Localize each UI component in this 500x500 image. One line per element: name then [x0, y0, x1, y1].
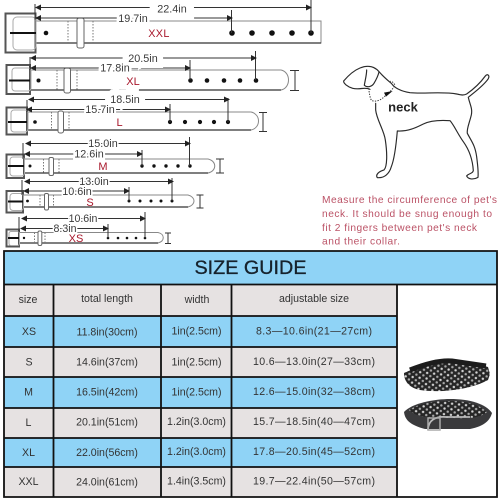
- collar diagram: XS: 8.3in: [54, 223, 77, 235]
- collar diagram: M: [6, 137, 224, 178]
- collar diagram: L: 15.7in: [85, 104, 115, 116]
- row XXL: [18, 476, 375, 488]
- studded collar: bottom: [404, 399, 492, 430]
- collar diagram: S: [6, 176, 204, 212]
- row XL: 22.0in(56cm): [76, 447, 138, 459]
- row L: 20.1in(51cm): [76, 416, 138, 428]
- row XS: 11.8in(30cm): [76, 326, 138, 338]
- collar diagram: XXL: 19.7in: [118, 13, 148, 25]
- row L: [26, 416, 375, 429]
- measuring instructions: [322, 195, 497, 248]
- measuring instructions: Measure the circumference of pet's: [322, 195, 497, 206]
- measuring instructions: and their collar.: [322, 236, 400, 248]
- row M: M: [24, 386, 33, 398]
- row XS: [22, 326, 372, 338]
- row S: [25, 356, 375, 368]
- collar diagram: L: L: [116, 117, 123, 129]
- row M: 16.5in(42cm): [76, 386, 138, 398]
- column headers: [19, 293, 349, 306]
- table row backgrounds: [4, 251, 497, 497]
- collar diagram: M: 12.6in: [74, 148, 104, 160]
- collar diagram: M: 15.0in: [88, 138, 118, 150]
- collar diagram: XS: [6, 212, 171, 246]
- studded collar: top: [404, 360, 490, 391]
- icon: dotted collar line and pointer: [369, 81, 395, 101]
- row L: 1.2in(3.0cm): [167, 416, 226, 428]
- row XS: 8.3—10.6in(21—27cm): [256, 326, 372, 338]
- row XXL: 24.0in(61cm): [76, 476, 138, 488]
- table title: SIZE GUIDE: [194, 258, 306, 279]
- row L: L: [26, 417, 32, 429]
- collar diagram: S: S: [86, 197, 94, 209]
- row M: [24, 386, 375, 398]
- collar diagram: XS: XS: [69, 233, 83, 245]
- collar diagram: M: M: [98, 161, 108, 173]
- collar diagram: XL: [6, 51, 299, 94]
- column headers: size: [19, 294, 38, 306]
- row S: 1in(2.5cm): [171, 356, 222, 368]
- row XS: 1in(2.5cm): [171, 326, 222, 338]
- dog illustration with neck label: [344, 66, 489, 179]
- measuring instructions: fit 2 fingers between pet's neck: [322, 223, 478, 234]
- collar diagram: XL: XL: [126, 76, 140, 88]
- collar diagram: L: [6, 94, 267, 134]
- measuring instructions: neck. It should be snug enough to: [322, 209, 492, 220]
- row S: 10.6—13.0in(27—33cm): [253, 356, 375, 368]
- row XL: 1.2in(3.0cm): [167, 446, 226, 458]
- row S: S: [25, 356, 33, 368]
- neck label: neck: [388, 100, 419, 114]
- row L: 15.7—18.5in(40—47cm): [253, 416, 375, 428]
- row XXL: 19.7—22.4in(50—57cm): [253, 476, 375, 488]
- collar diagram: XL: 17.8in: [100, 62, 130, 74]
- row XXL: XXL: [18, 476, 39, 488]
- collar diagram: XS: 10.6in: [69, 213, 98, 225]
- icon: dog outline: [344, 66, 489, 179]
- row M: 12.6—15.0in(32—38cm): [253, 386, 375, 398]
- collar diagram: XXL: 22.4in: [157, 4, 187, 16]
- column headers: adjustable size: [279, 293, 349, 305]
- collar diagram: S: 10.6in: [62, 186, 92, 198]
- collar diagram: S: 13.0in: [79, 176, 109, 188]
- size guide table: [4, 251, 497, 497]
- row XL: XL: [22, 447, 35, 459]
- row M: 1in(2.5cm): [171, 386, 222, 398]
- row XL: [22, 446, 375, 459]
- collar diagram: L: 18.5in: [110, 94, 140, 106]
- collar diagram: XL: 20.5in: [128, 53, 158, 65]
- row XXL: 1.4in(3.5cm): [167, 476, 226, 488]
- column headers: width: [184, 294, 209, 306]
- row S: 14.6in(37cm): [76, 356, 138, 368]
- collar diagram: XXL: [6, 0, 321, 52]
- collar diagram: XXL: XXL: [148, 28, 170, 40]
- product photo: two studded collars: [404, 360, 492, 430]
- column headers: total length: [81, 293, 133, 305]
- row XS: XS: [22, 326, 36, 338]
- row XL: 17.8—20.5in(45—52cm): [253, 446, 375, 458]
